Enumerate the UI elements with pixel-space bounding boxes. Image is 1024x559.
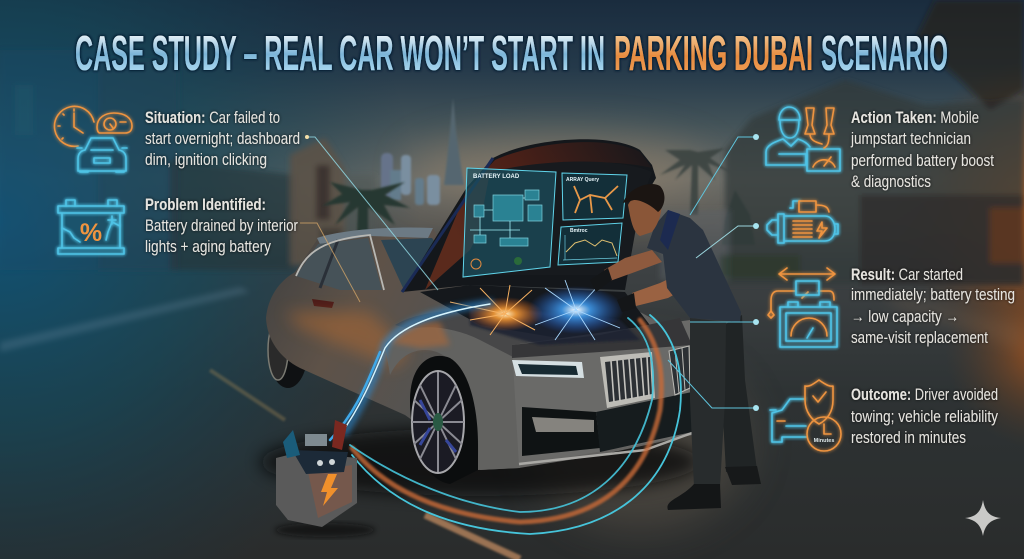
panel: battery load schematic (463, 168, 556, 277)
hood edge strut (402, 158, 493, 292)
icon: arrows, battery and gauge (768, 268, 837, 347)
text: problem identified: Battery drained by interior (145, 216, 298, 235)
car body (266, 228, 694, 470)
text: outcome: Outcome: Driver avoided (851, 385, 998, 404)
text: problem identified: lights + aging battery (145, 237, 271, 256)
text: result: same-visit replacement (851, 328, 988, 347)
panel: voltage chart: Bmtroc (570, 228, 588, 234)
boots (667, 484, 721, 510)
text: action taken: & diagnostics (851, 172, 931, 191)
holographic diagnostics panels (463, 168, 627, 277)
headlight (512, 360, 584, 378)
right leg (715, 315, 757, 472)
text: outcome (851, 385, 998, 447)
text: action taken: jumpstart technician (850, 129, 971, 148)
portable jump starter (275, 420, 375, 537)
hood underside (425, 142, 652, 290)
icon: sparkle watermark (965, 500, 1001, 536)
text: problem identified: Problem Identified: (145, 195, 266, 214)
text: situation: Situation: Car failed to (145, 108, 280, 127)
shadow under car (260, 428, 700, 496)
left leg (690, 318, 726, 487)
distant buildings left (0, 50, 375, 270)
gloves (590, 268, 612, 292)
palm trees (322, 148, 755, 265)
text: situation: start overnight; dashboard (145, 129, 300, 148)
title: PARKING DUBAI (614, 27, 813, 81)
icon: car, shield and stopwatch: Minutes (814, 438, 834, 444)
side windows (296, 238, 382, 290)
text: problem identified (145, 195, 298, 256)
head (628, 195, 661, 236)
windshield (381, 238, 448, 290)
door reflection (285, 312, 410, 368)
panel: voltage chart (558, 223, 622, 265)
text: action taken (850, 108, 994, 191)
right villa building (660, 0, 1024, 285)
text: action taken: Action Taken: Mobile (851, 108, 979, 127)
front fascia (512, 320, 694, 466)
dark hood liner (470, 162, 652, 275)
arm far (604, 250, 662, 281)
leader lines (300, 134, 759, 411)
Dubai skyline with Burj Khalifa (381, 98, 464, 205)
arm near (632, 272, 692, 306)
roof highlight (317, 227, 433, 244)
luxury car (260, 227, 700, 496)
door handle (312, 299, 334, 308)
front fender (385, 327, 520, 470)
jumper cables with energy glow (330, 303, 681, 534)
text: result: Result: Car started (851, 265, 963, 284)
engine bay (420, 285, 655, 345)
panel: battery load schematic: BATTERY LOAD (473, 174, 520, 180)
lower intake (522, 407, 600, 456)
open hood (402, 139, 656, 292)
engine sparks (450, 280, 640, 345)
panel: wiring diagram (562, 173, 627, 220)
text: outcome: restored in minutes (851, 428, 966, 447)
text: result (851, 265, 1015, 347)
icon: technician with clamps and gauge (766, 107, 840, 171)
text: situation: dim, ignition clicking (145, 150, 267, 169)
rear wheel (268, 312, 308, 388)
panel: wiring diagram: ARRAY Query (566, 177, 599, 183)
icon: cracked battery with percent: % (80, 219, 102, 247)
icon: starter motor (767, 201, 838, 243)
icon: car, shield and stopwatch (770, 380, 841, 451)
icon: clock, dashboard and car (54, 106, 132, 172)
hood surface (395, 311, 620, 358)
text: result: → low capacity → (851, 307, 959, 326)
chrome grille (600, 346, 690, 408)
front wheel (410, 356, 478, 484)
text: situation (145, 108, 300, 169)
mechanic technician (590, 184, 761, 510)
icon: cracked battery with percent (58, 200, 124, 254)
shirt torso (647, 210, 741, 322)
